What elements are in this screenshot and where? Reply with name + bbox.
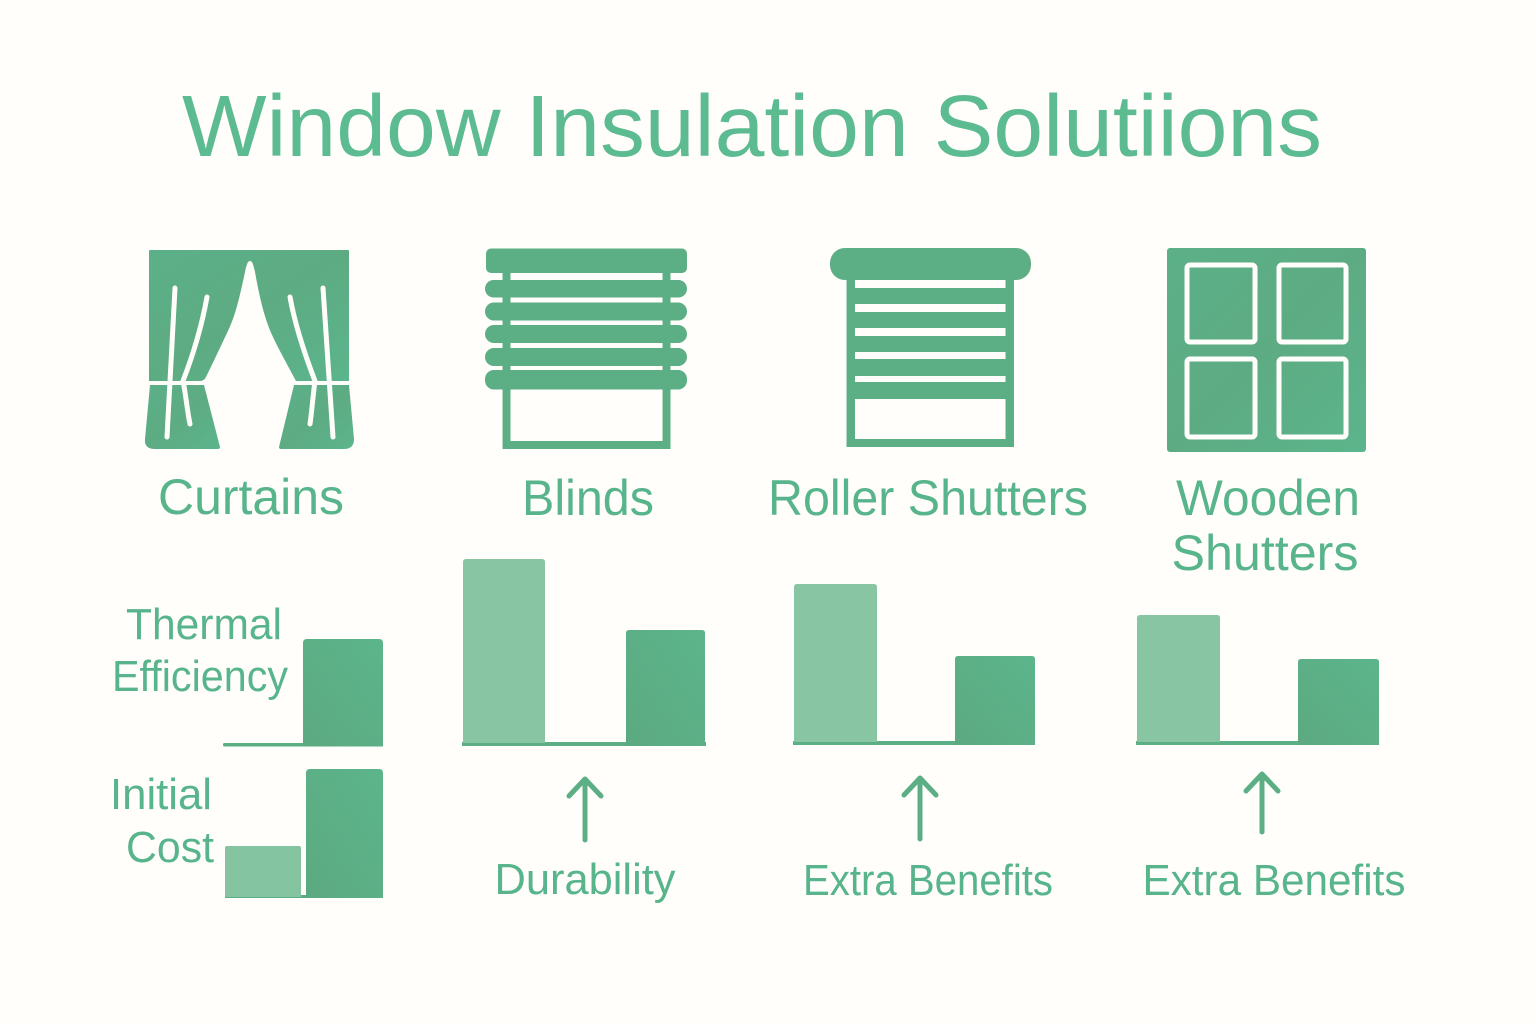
arrow: roller shutters benefits bbox=[904, 778, 936, 839]
label: wooden shutters: Shutters bbox=[1172, 525, 1358, 581]
label: initial cost bbox=[110, 770, 214, 872]
label: wooden shutters bbox=[1172, 470, 1360, 581]
chart: curtains thermal efficiency bbox=[223, 639, 383, 746]
label: initial cost: Cost bbox=[126, 823, 214, 872]
icon: wooden shutters bbox=[1167, 248, 1366, 452]
chart: blinds bbox=[462, 559, 706, 746]
label: extra benefits 1: Extra Benefits bbox=[803, 856, 1053, 905]
label: extra benefits 2: Extra Benefits bbox=[1142, 856, 1406, 905]
label: initial cost: Initial bbox=[110, 770, 212, 819]
chart: roller shutters bbox=[793, 584, 1035, 745]
icon: roller shutters bbox=[830, 248, 1031, 447]
label: thermal efficiency: Thermal bbox=[126, 600, 282, 649]
label: thermal efficiency bbox=[112, 600, 288, 701]
chart: wooden shutters bbox=[1136, 615, 1379, 745]
label: roller shutters: Roller Shutters bbox=[768, 470, 1088, 526]
arrow: durability bbox=[569, 779, 601, 840]
label: thermal efficiency: Efficiency bbox=[112, 652, 288, 701]
label: blinds: Blinds bbox=[522, 470, 654, 526]
icon: blinds bbox=[485, 248, 687, 449]
arrow: wooden shutters benefits bbox=[1246, 774, 1278, 832]
label: durability: Durability bbox=[494, 855, 676, 904]
chart: curtains initial cost bbox=[225, 769, 383, 898]
label: curtains: Curtains bbox=[158, 469, 344, 525]
title: Window Insulation Solutiions bbox=[182, 78, 1322, 175]
label: wooden shutters: Wooden bbox=[1176, 470, 1360, 526]
icon: curtains bbox=[145, 250, 354, 449]
